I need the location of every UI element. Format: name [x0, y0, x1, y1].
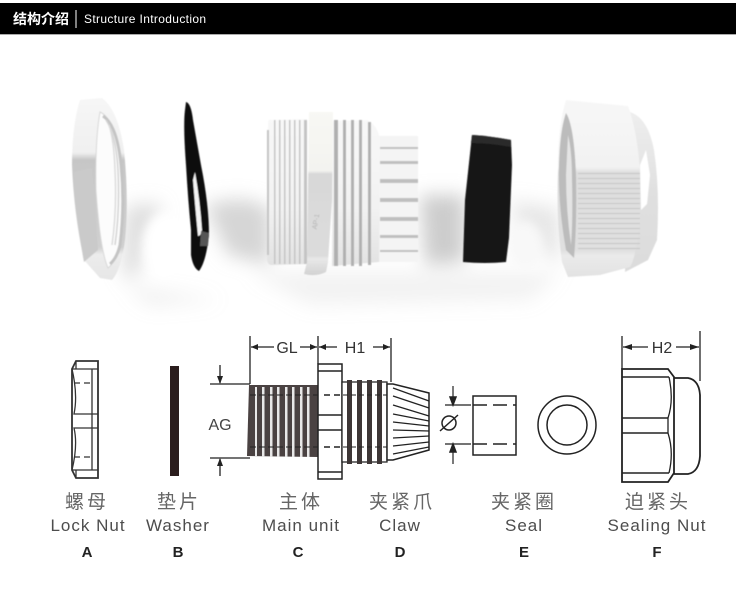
label: Seal: Seal — [505, 516, 543, 535]
dimension label GL: GL — [276, 340, 298, 357]
photo: main unit: AP-1 — [312, 213, 321, 230]
dimension symbol: diameter — [440, 415, 458, 431]
diagram B: washer — [170, 366, 179, 476]
label: Lock Nut: A — [82, 544, 93, 561]
label: Seal: 夹紧圈 — [491, 491, 557, 513]
label: Washer: Washer — [146, 516, 210, 535]
label: Sealing Nut: Sealing Nut — [608, 516, 706, 535]
label: Washer: B — [173, 544, 184, 561]
photo: main unit — [267, 112, 418, 275]
label: Sealing Nut: F — [652, 544, 662, 561]
photo of exploded cable gland — [72, 98, 658, 306]
dimension label H2: H2 — [652, 340, 672, 357]
diagram C: main unit with dimensions — [208, 336, 392, 479]
diagram A: lock nut — [72, 361, 98, 478]
dimension label H1: H1 — [345, 340, 365, 357]
label: Main unit: Main unit — [262, 516, 340, 535]
label: Main unit — [262, 491, 340, 561]
photo: seal — [463, 135, 512, 263]
label: Lock Nut: 螺母 — [65, 491, 109, 513]
label: Sealing Nut — [608, 491, 706, 561]
label: Sealing Nut: 迫紧头 — [625, 491, 691, 513]
label: Claw — [369, 491, 435, 561]
photo shadows — [122, 195, 560, 306]
label: Lock Nut — [50, 491, 126, 561]
dimension label AG: AG — [208, 417, 232, 434]
label: Claw: Claw — [379, 516, 421, 535]
label: Claw: 夹紧爪 — [369, 491, 435, 513]
header title: Chinese: 结构介绍 — [13, 11, 69, 27]
label: Seal — [491, 491, 557, 561]
rear thread — [342, 380, 392, 464]
label: Claw: D — [395, 544, 406, 561]
threaded section — [247, 385, 318, 457]
label: Main unit: C — [293, 544, 304, 561]
label: Seal: E — [519, 544, 529, 561]
diagram F: sealing nut — [622, 331, 700, 482]
label: Washer: 垫片 — [157, 491, 201, 513]
diagram D: claw — [387, 384, 429, 460]
label: Lock Nut: Lock Nut — [50, 516, 126, 535]
label: Main unit: 主体 — [279, 491, 323, 513]
header title: English: Structure Introduction — [84, 12, 206, 26]
header bar — [0, 3, 736, 35]
photo: washer — [184, 102, 209, 271]
diagram E: seal — [440, 386, 596, 464]
photo: lock nut — [72, 98, 127, 280]
label: Washer — [146, 491, 210, 561]
photo: sealing nut — [558, 100, 658, 277]
flange — [318, 364, 342, 479]
